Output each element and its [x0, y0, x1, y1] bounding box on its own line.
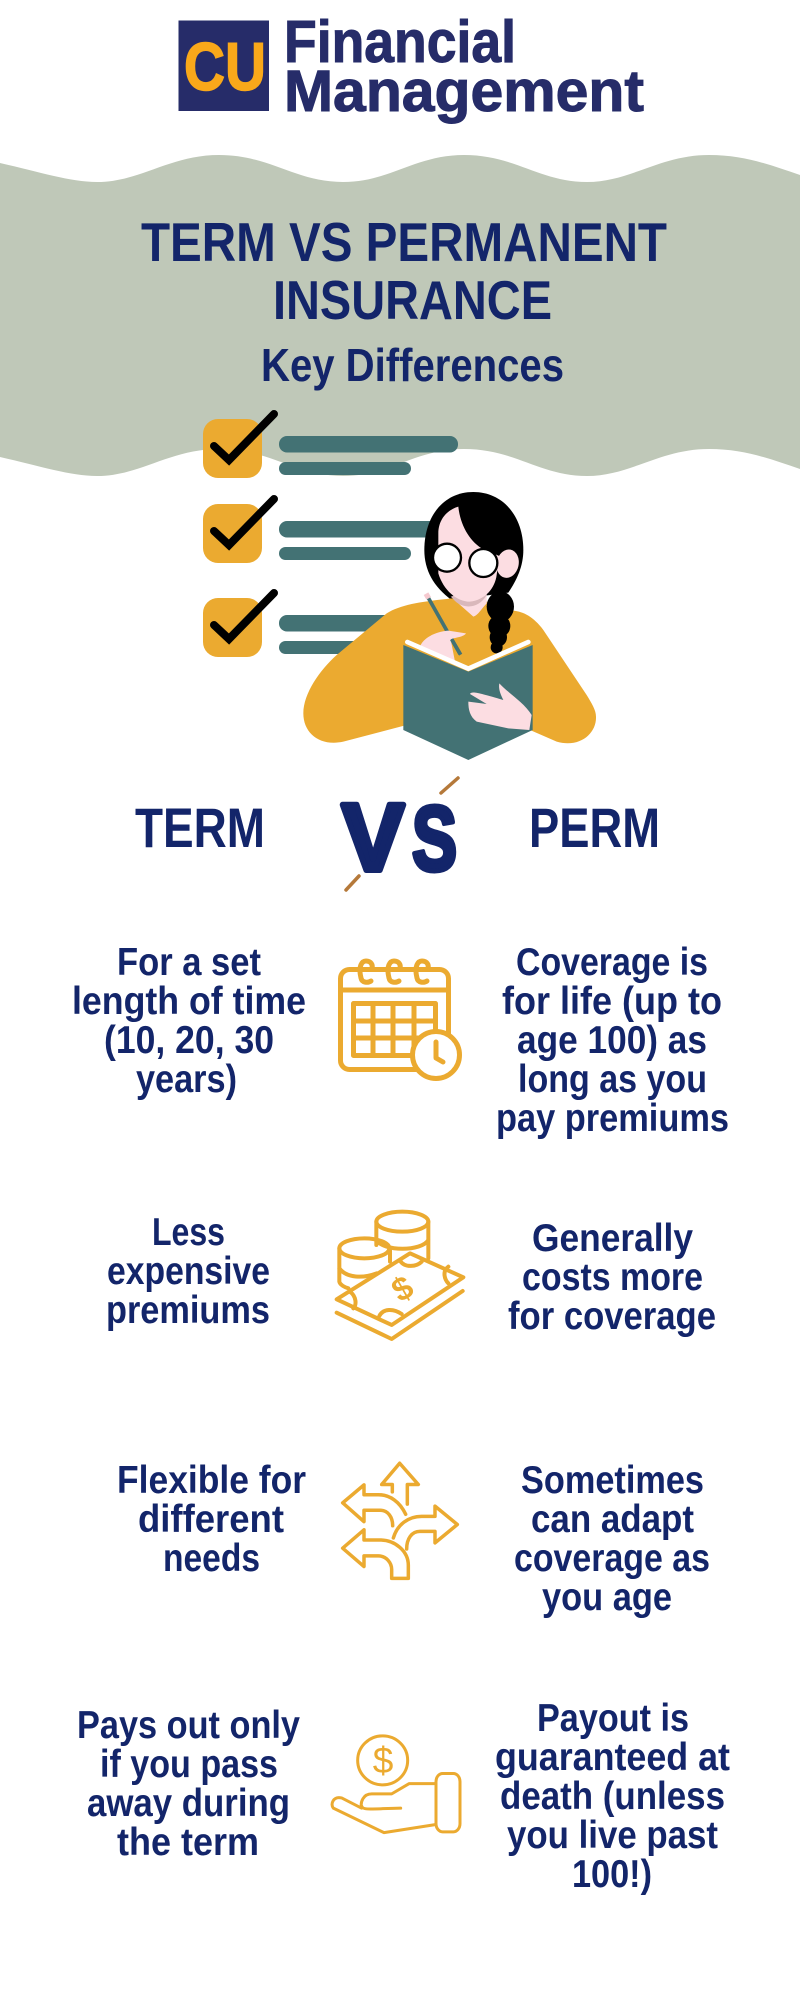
logo mark: CU square: CU — [184, 29, 266, 105]
checklist row 1 — [203, 414, 458, 478]
illustration: checklist — [203, 414, 458, 657]
perm text: duration: pay premiums — [496, 1097, 729, 1140]
term text: duration: length of time — [72, 980, 306, 1023]
term text: cost: Less — [152, 1211, 225, 1254]
term text: duration: For a set — [117, 941, 261, 984]
perm text: flexibility: you age — [542, 1576, 672, 1619]
term text: duration: years) — [136, 1058, 237, 1101]
illustration: woman reading a book — [303, 492, 596, 760]
icon: hand holding a dollar coin: $ — [373, 1740, 393, 1781]
perm text: duration: age 100) as — [517, 1019, 707, 1062]
perm text: payout: death (unless — [500, 1775, 725, 1818]
term text: flexibility — [117, 1459, 306, 1580]
icon: calendar with clock — [340, 961, 460, 1078]
term text: flexibility: needs — [163, 1537, 260, 1580]
perm text: duration: for life (up to — [502, 980, 722, 1023]
column heading: term: TERM — [135, 796, 265, 859]
perm text: payout: you live past — [507, 1814, 718, 1857]
term text: payout: if you pass — [100, 1743, 278, 1786]
perm text: cost: for coverage — [508, 1295, 716, 1338]
term text: cost — [106, 1211, 270, 1332]
perm text: flexibility: can adapt — [531, 1498, 694, 1541]
column heading: perm: PERM — [529, 796, 660, 859]
term text: payout: the term — [117, 1821, 259, 1864]
term text: payout: Pays out only — [77, 1704, 300, 1747]
checklist row 2 — [203, 499, 458, 563]
term text: payout — [77, 1704, 300, 1864]
title: INSURANCE — [273, 269, 552, 331]
icon: hand holding a dollar coin — [332, 1736, 460, 1833]
term text: flexibility: Flexible for — [117, 1459, 306, 1502]
perm text: payout: 100!) — [572, 1853, 652, 1896]
header logo — [178, 9, 644, 124]
vs badge: V — [342, 785, 404, 891]
icon: coins and banknotes — [337, 1212, 463, 1339]
icon: diverging arrows — [343, 1463, 457, 1578]
term text: duration: (10, 20, 30 — [104, 1019, 274, 1062]
title: TERM VS PERMANENT — [141, 211, 667, 273]
term text: payout: away during — [87, 1782, 290, 1825]
term text: cost: expensive — [107, 1250, 270, 1293]
perm text: flexibility — [514, 1459, 710, 1619]
term text: flexibility: different — [138, 1498, 284, 1541]
perm text: flexibility: Sometimes — [521, 1459, 704, 1502]
wavy green banner — [0, 155, 800, 476]
logo wordmark: Financial — [284, 9, 516, 75]
perm text: duration: long as you — [518, 1058, 707, 1101]
perm text: flexibility: coverage as — [514, 1537, 710, 1580]
perm text: payout: guaranteed at — [495, 1736, 730, 1779]
title — [141, 211, 667, 331]
perm text: duration: Coverage is — [516, 941, 708, 984]
icon: coins and banknotes: $ — [385, 1268, 419, 1309]
perm text: duration — [496, 941, 729, 1140]
term text: duration — [72, 941, 306, 1101]
perm text: payout: Payout is — [537, 1697, 689, 1740]
subtitle: Key Differences — [261, 339, 564, 391]
perm text: cost: costs more — [522, 1256, 703, 1299]
perm text: cost — [508, 1217, 716, 1338]
perm text: cost: Generally — [532, 1217, 693, 1260]
perm text: payout — [495, 1697, 730, 1896]
vs badge — [342, 778, 458, 891]
vs badge: S — [412, 788, 457, 890]
term text: cost: premiums — [106, 1289, 270, 1332]
logo wordmark — [284, 9, 644, 124]
logo wordmark: Management — [284, 59, 644, 124]
checklist row 3 — [203, 593, 458, 657]
